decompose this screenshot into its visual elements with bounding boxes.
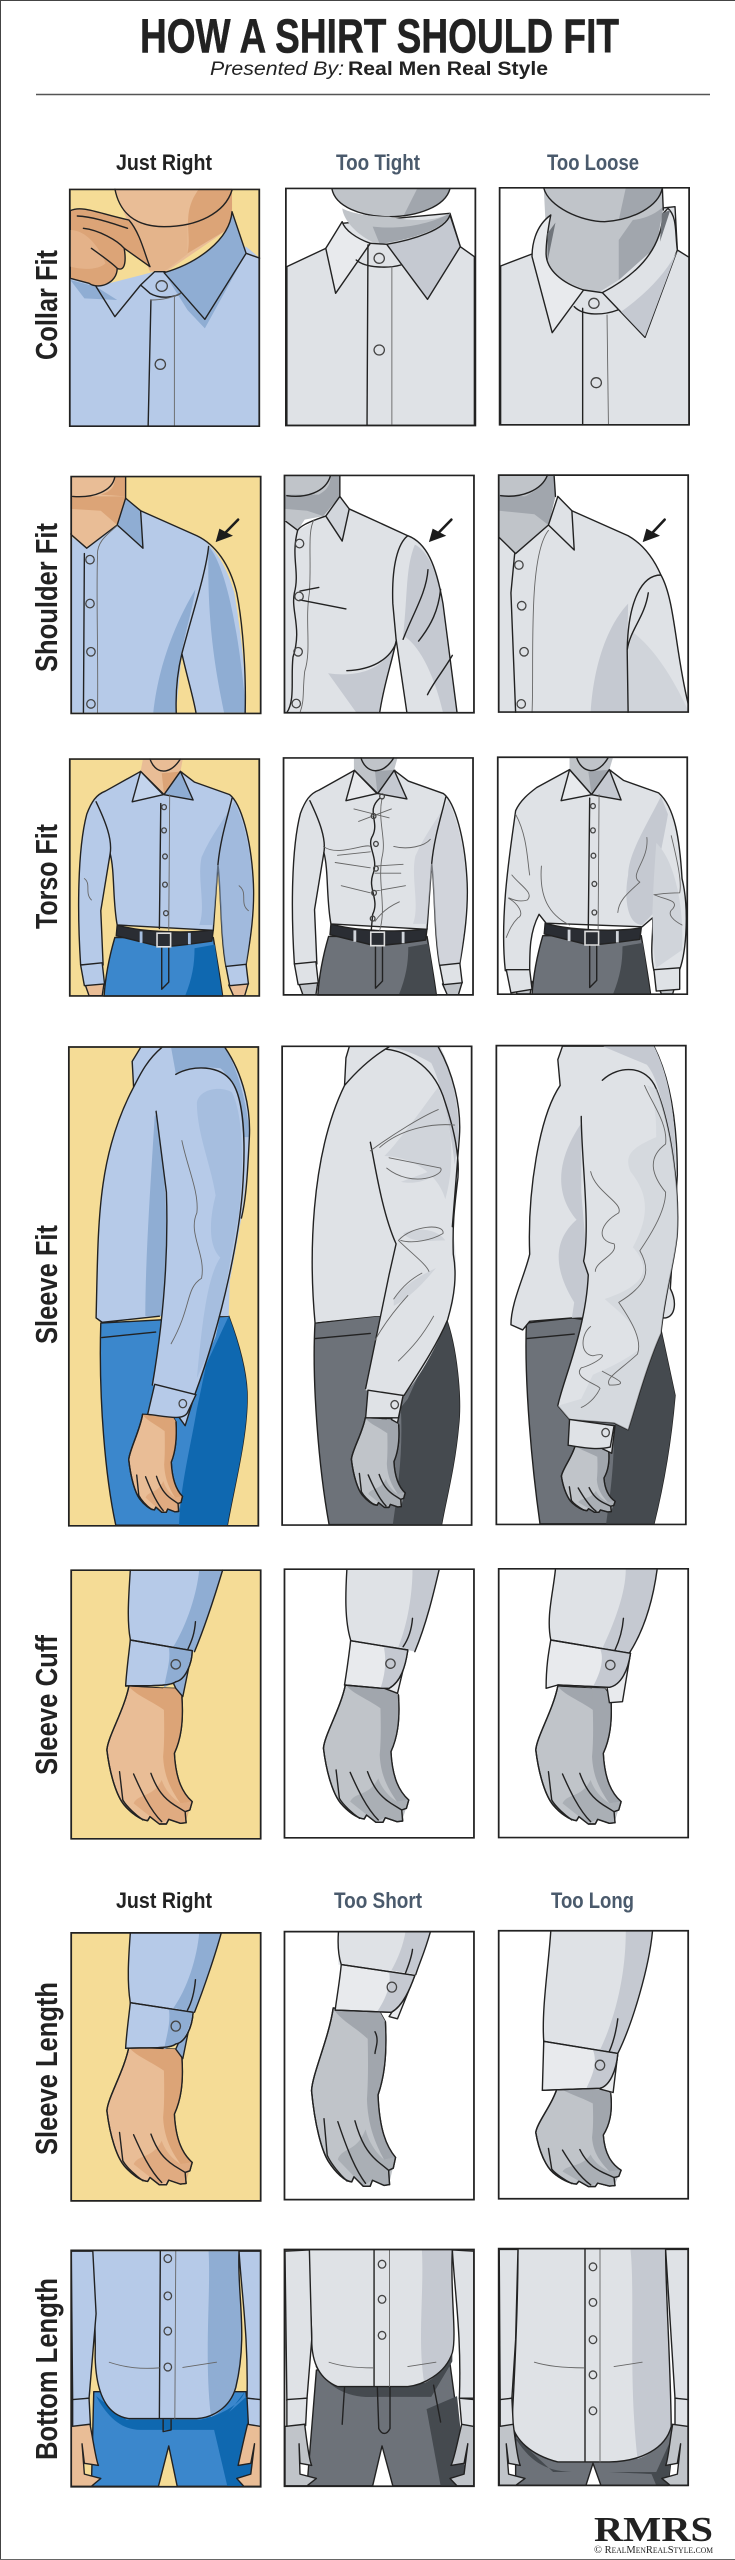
label: torso fit: Torso Fit (29, 824, 64, 929)
panel: sleeve fit too loose (495, 1045, 687, 1525)
row: sleeve fit (29, 1045, 687, 1527)
column headers top: Just Right (116, 150, 213, 175)
logo: RMRS: RMRS (594, 2510, 713, 2549)
column headers top: Too Loose (547, 150, 639, 175)
label: bottom length: Bottom Length (29, 2278, 64, 2460)
column headers lower: Too Long (551, 1888, 634, 1913)
panel: cuff too short (284, 1568, 475, 1839)
panel: cuff too long (498, 1568, 689, 1838)
panel: length too short (284, 1931, 475, 2200)
row: sleeve length (29, 1930, 689, 2202)
row: collar fit (29, 187, 690, 427)
subtitle: Presented By: (210, 58, 344, 80)
row: sleeve cuff (29, 1568, 689, 1840)
row: torso fit (29, 756, 688, 997)
panel: sleeve fit just right (68, 1046, 259, 1527)
panel: torso too tight (283, 757, 474, 996)
panel: shoulder too tight (284, 475, 475, 714)
column headers lower (116, 1888, 634, 1913)
label: sleeve cuff: Sleeve Cuff (29, 1634, 64, 1775)
label: shoulder fit: Shoulder Fit (29, 523, 64, 672)
panel: length just right (70, 1932, 262, 2202)
label: sleeve fit: Sleeve Fit (29, 1225, 64, 1344)
label: sleeve length: Sleeve Length (29, 1982, 64, 2155)
row: bottom length (29, 2248, 689, 2488)
column headers lower: Just Right (116, 1888, 213, 1913)
panel: shoulder just right (70, 476, 262, 714)
panel: bottom too short (284, 2249, 475, 2487)
subtitle: Real Men Real Style (348, 58, 548, 80)
panel: bottom just right (70, 2249, 262, 2488)
panel: collar just right (69, 189, 260, 427)
column headers lower: Too Short (334, 1888, 423, 1913)
panel: sleeve fit too tight (281, 1045, 472, 1526)
panel: bottom too long (498, 2248, 689, 2486)
logo: RMRS: © RealMenRealStyle.com (594, 2544, 713, 2556)
panel: shoulder too loose (498, 474, 689, 713)
column headers top (116, 150, 639, 175)
panel: collar too tight (285, 188, 476, 426)
panel: torso too loose (497, 756, 688, 995)
row: shoulder fit (29, 474, 689, 714)
panel: length too long (498, 1930, 689, 2200)
panel: torso just right (69, 758, 260, 997)
panel: collar too loose (499, 187, 690, 426)
label: collar fit: Collar Fit (29, 250, 64, 360)
column headers top: Too Tight (336, 150, 421, 175)
panel: cuff just right (70, 1569, 262, 1840)
